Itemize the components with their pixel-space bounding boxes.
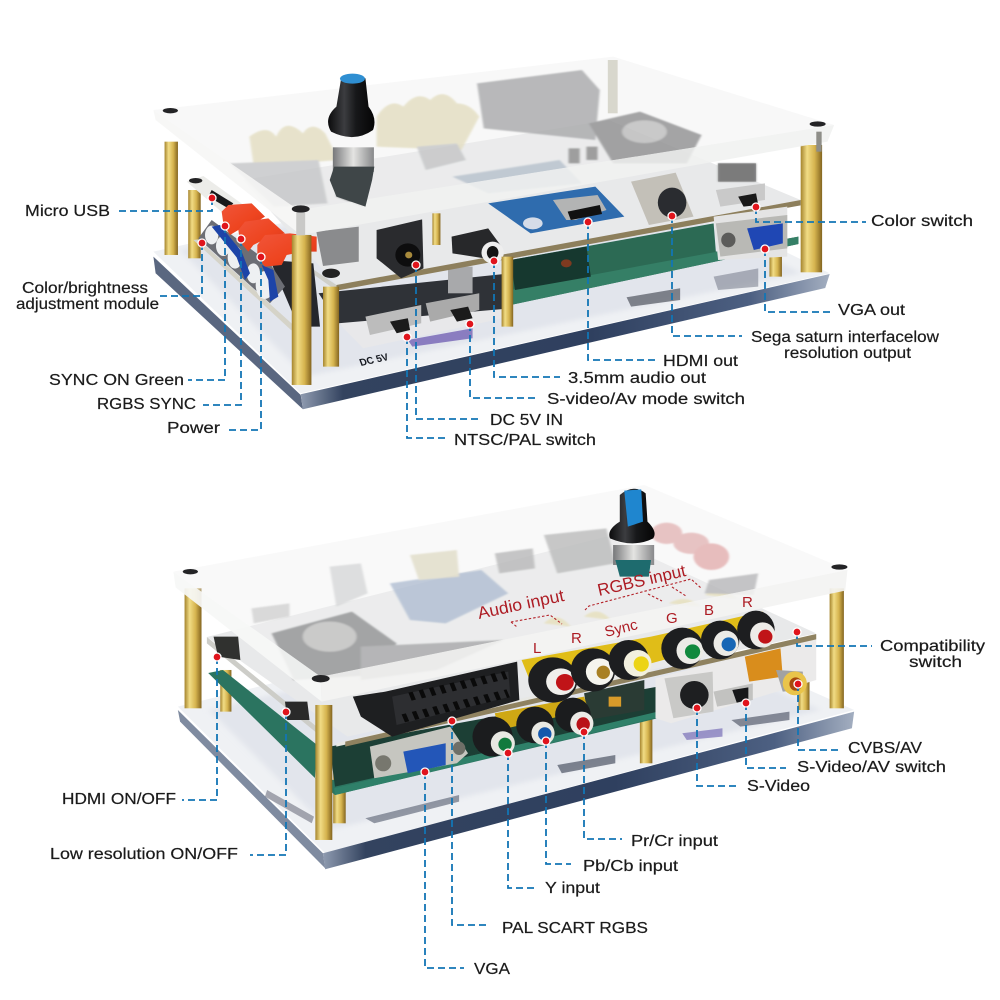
- VGA connector: [716, 215, 787, 257]
- red port letters: R: [571, 630, 582, 647]
- front screw shaft: [296, 213, 305, 235]
- CVBS jack: [783, 671, 807, 695]
- product photo: bottom device, front view: [173, 485, 854, 869]
- rear gold posts: [185, 588, 844, 823]
- red annotation: RGBS input: RGBS input: [596, 561, 688, 600]
- red port letters: R: [742, 594, 753, 611]
- callout: Sega saturn output: resolution output: [784, 345, 912, 362]
- callout: Pr/Cr input: [580, 728, 719, 850]
- callout: NTSC/PAL switch: NTSC/PAL switch: [454, 432, 596, 449]
- S-video connector: [631, 163, 756, 225]
- callout: S-Video/AV switch: S-Video/AV switch: [797, 759, 946, 776]
- callout: SYNC ON Green: SYNC ON Green: [49, 372, 184, 389]
- board text prints: [365, 712, 789, 823]
- top acrylic plate: [173, 485, 847, 702]
- callouts top device: [16, 194, 973, 449]
- callout: Y input: [504, 749, 601, 897]
- callout: S-video/Av mode switch: S-video/Av mode switch: [547, 391, 745, 408]
- internals seen through the top plate: [229, 70, 756, 207]
- callout: DC 5V IN: [412, 261, 563, 429]
- yellow RCA backing plates: [495, 612, 772, 730]
- USB port behind posts: [316, 227, 359, 266]
- product photo: top device, rear view: [153, 57, 834, 409]
- red port letters: B: [704, 602, 714, 619]
- white rear-right board: [656, 637, 816, 723]
- callout: Sega saturn output: Sega saturn interfacelow: [751, 329, 940, 346]
- callout: CVBS/AV: [794, 680, 923, 757]
- callout: HDMI ON/OFF: HDMI ON/OFF: [62, 791, 176, 808]
- callout: Color/brightness adjustment module: adjustment module: [16, 296, 159, 313]
- callout: VGA out: [761, 245, 906, 319]
- module dark circuitry: [270, 260, 320, 327]
- callout: PAL SCART RGBS: PAL SCART RGBS: [502, 920, 648, 937]
- bottom acrylic plate: [178, 600, 854, 869]
- power, sync and colour adjustment module: [187, 176, 320, 331]
- callout: S-Video: [693, 704, 810, 795]
- S-Video/AV slide switch: [714, 683, 753, 707]
- HDMI breakout board: [488, 187, 624, 233]
- top acrylic plate: [153, 57, 834, 235]
- RCA jack: audio L: [528, 657, 577, 703]
- audio jack: [452, 228, 504, 264]
- red port letters: G: [666, 610, 678, 627]
- callout: RGBS SYNC: RGBS SYNC: [97, 396, 196, 413]
- module lower board with capacitors: [193, 220, 293, 331]
- lower front board with switches: DC 5V: [358, 352, 391, 369]
- callout: VGA out: VGA out: [838, 302, 906, 319]
- red annotation: Audio input: Audio input: [476, 586, 566, 623]
- bottom acrylic plate: [153, 155, 830, 409]
- RCA jack: G: [661, 628, 703, 669]
- RCA jack: R: [737, 611, 775, 649]
- front gold post: [315, 705, 332, 840]
- callout: Power: Power: [167, 420, 220, 437]
- callout: 3.5mm audio out: 3.5mm audio out: [568, 370, 707, 387]
- green circuit board: [208, 670, 658, 795]
- callout: VGA: [421, 768, 511, 978]
- callout: Color switch: [752, 203, 973, 230]
- DC power jack: [377, 213, 440, 278]
- callout: Power: [167, 253, 265, 437]
- color slide switch: [716, 183, 765, 207]
- internals seen through the top plate: [252, 523, 758, 680]
- rotary knob: [609, 489, 655, 577]
- callout: Color/brightness adjustment module: Color/brightness: [22, 280, 148, 297]
- callout: S-video/Av mode switch: [466, 320, 745, 408]
- callouts bottom device: [50, 628, 985, 978]
- SCART socket: [353, 662, 519, 737]
- callout: Pb/Cb input: Pb/Cb input: [583, 858, 679, 875]
- module top strip with USB: [187, 176, 245, 213]
- callout: Compatibility switch: switch: [909, 654, 962, 671]
- callout: DC 5V IN: DC 5V IN: [490, 412, 563, 429]
- RCA jack: B: [701, 621, 739, 659]
- front upper-board post and screw: [322, 257, 513, 367]
- callout: Compatibility switch: Compatibility: [880, 638, 985, 655]
- callout: NTSC/PAL switch: [403, 333, 596, 449]
- RCA jack: Pb/Cb input: [516, 707, 555, 745]
- callout: SYNC ON Green: [49, 222, 229, 389]
- rear and side gold posts: [165, 60, 822, 277]
- rotary knob: [328, 74, 375, 207]
- red port letters: L: [533, 640, 541, 657]
- callout: 3.5mm audio out: [490, 257, 707, 387]
- front gold post: [292, 235, 311, 385]
- side labels prints: [265, 790, 314, 823]
- callout: CVBS/AV: CVBS/AV: [848, 740, 923, 757]
- callout: S-Video/AV switch: [742, 699, 946, 776]
- callout: Low resolution ON/OFF: Low resolution ON/OFF: [50, 846, 238, 863]
- red knob 1: [222, 203, 265, 235]
- RCA jack: Sync: [609, 640, 651, 680]
- RCA jack: Y input: [472, 717, 515, 757]
- callout: RGBS SYNC: [97, 235, 245, 413]
- callout: HDMI ON/OFF: [62, 653, 221, 808]
- red knob 3: [257, 233, 317, 267]
- callout: Y input: Y input: [545, 880, 601, 897]
- callout: HDMI out: [584, 218, 739, 370]
- callout: HDMI out: HDMI out: [663, 353, 739, 370]
- callout: Low resolution ON/OFF: [50, 708, 290, 863]
- red port letters: Sync: [603, 616, 640, 641]
- callout: VGA: VGA: [474, 961, 511, 978]
- switches on side: [214, 637, 310, 720]
- callout: S-Video: S-Video: [747, 778, 810, 795]
- RCA jack: Pr/Cr input: [555, 698, 593, 735]
- callout: Micro USB: [25, 194, 216, 220]
- lower front board with switches: [319, 267, 511, 369]
- green circuit board: [511, 223, 798, 307]
- red annotation: RGBS input: [585, 561, 701, 610]
- callout: PAL SCART RGBS: [448, 717, 648, 937]
- red port letters: [533, 594, 753, 657]
- callout: Color switch: Color switch: [871, 213, 973, 230]
- VGA connector: [370, 727, 468, 778]
- callout: Color/brightness adjustment module: [16, 239, 206, 313]
- upper white board: [207, 537, 816, 747]
- callout: Micro USB: Micro USB: [25, 203, 110, 220]
- S-Video connector: [664, 672, 714, 718]
- callout: Compatibility switch: [793, 628, 985, 671]
- callout: Pr/Cr input: Pr/Cr input: [631, 833, 719, 850]
- callout: Sega saturn output: [668, 212, 940, 362]
- red knob 2: [238, 218, 285, 252]
- callout: Pb/Cb input: [542, 737, 679, 875]
- upper white board: [243, 120, 801, 291]
- RCA jack: audio R: [571, 648, 615, 692]
- lower port board: [336, 667, 653, 747]
